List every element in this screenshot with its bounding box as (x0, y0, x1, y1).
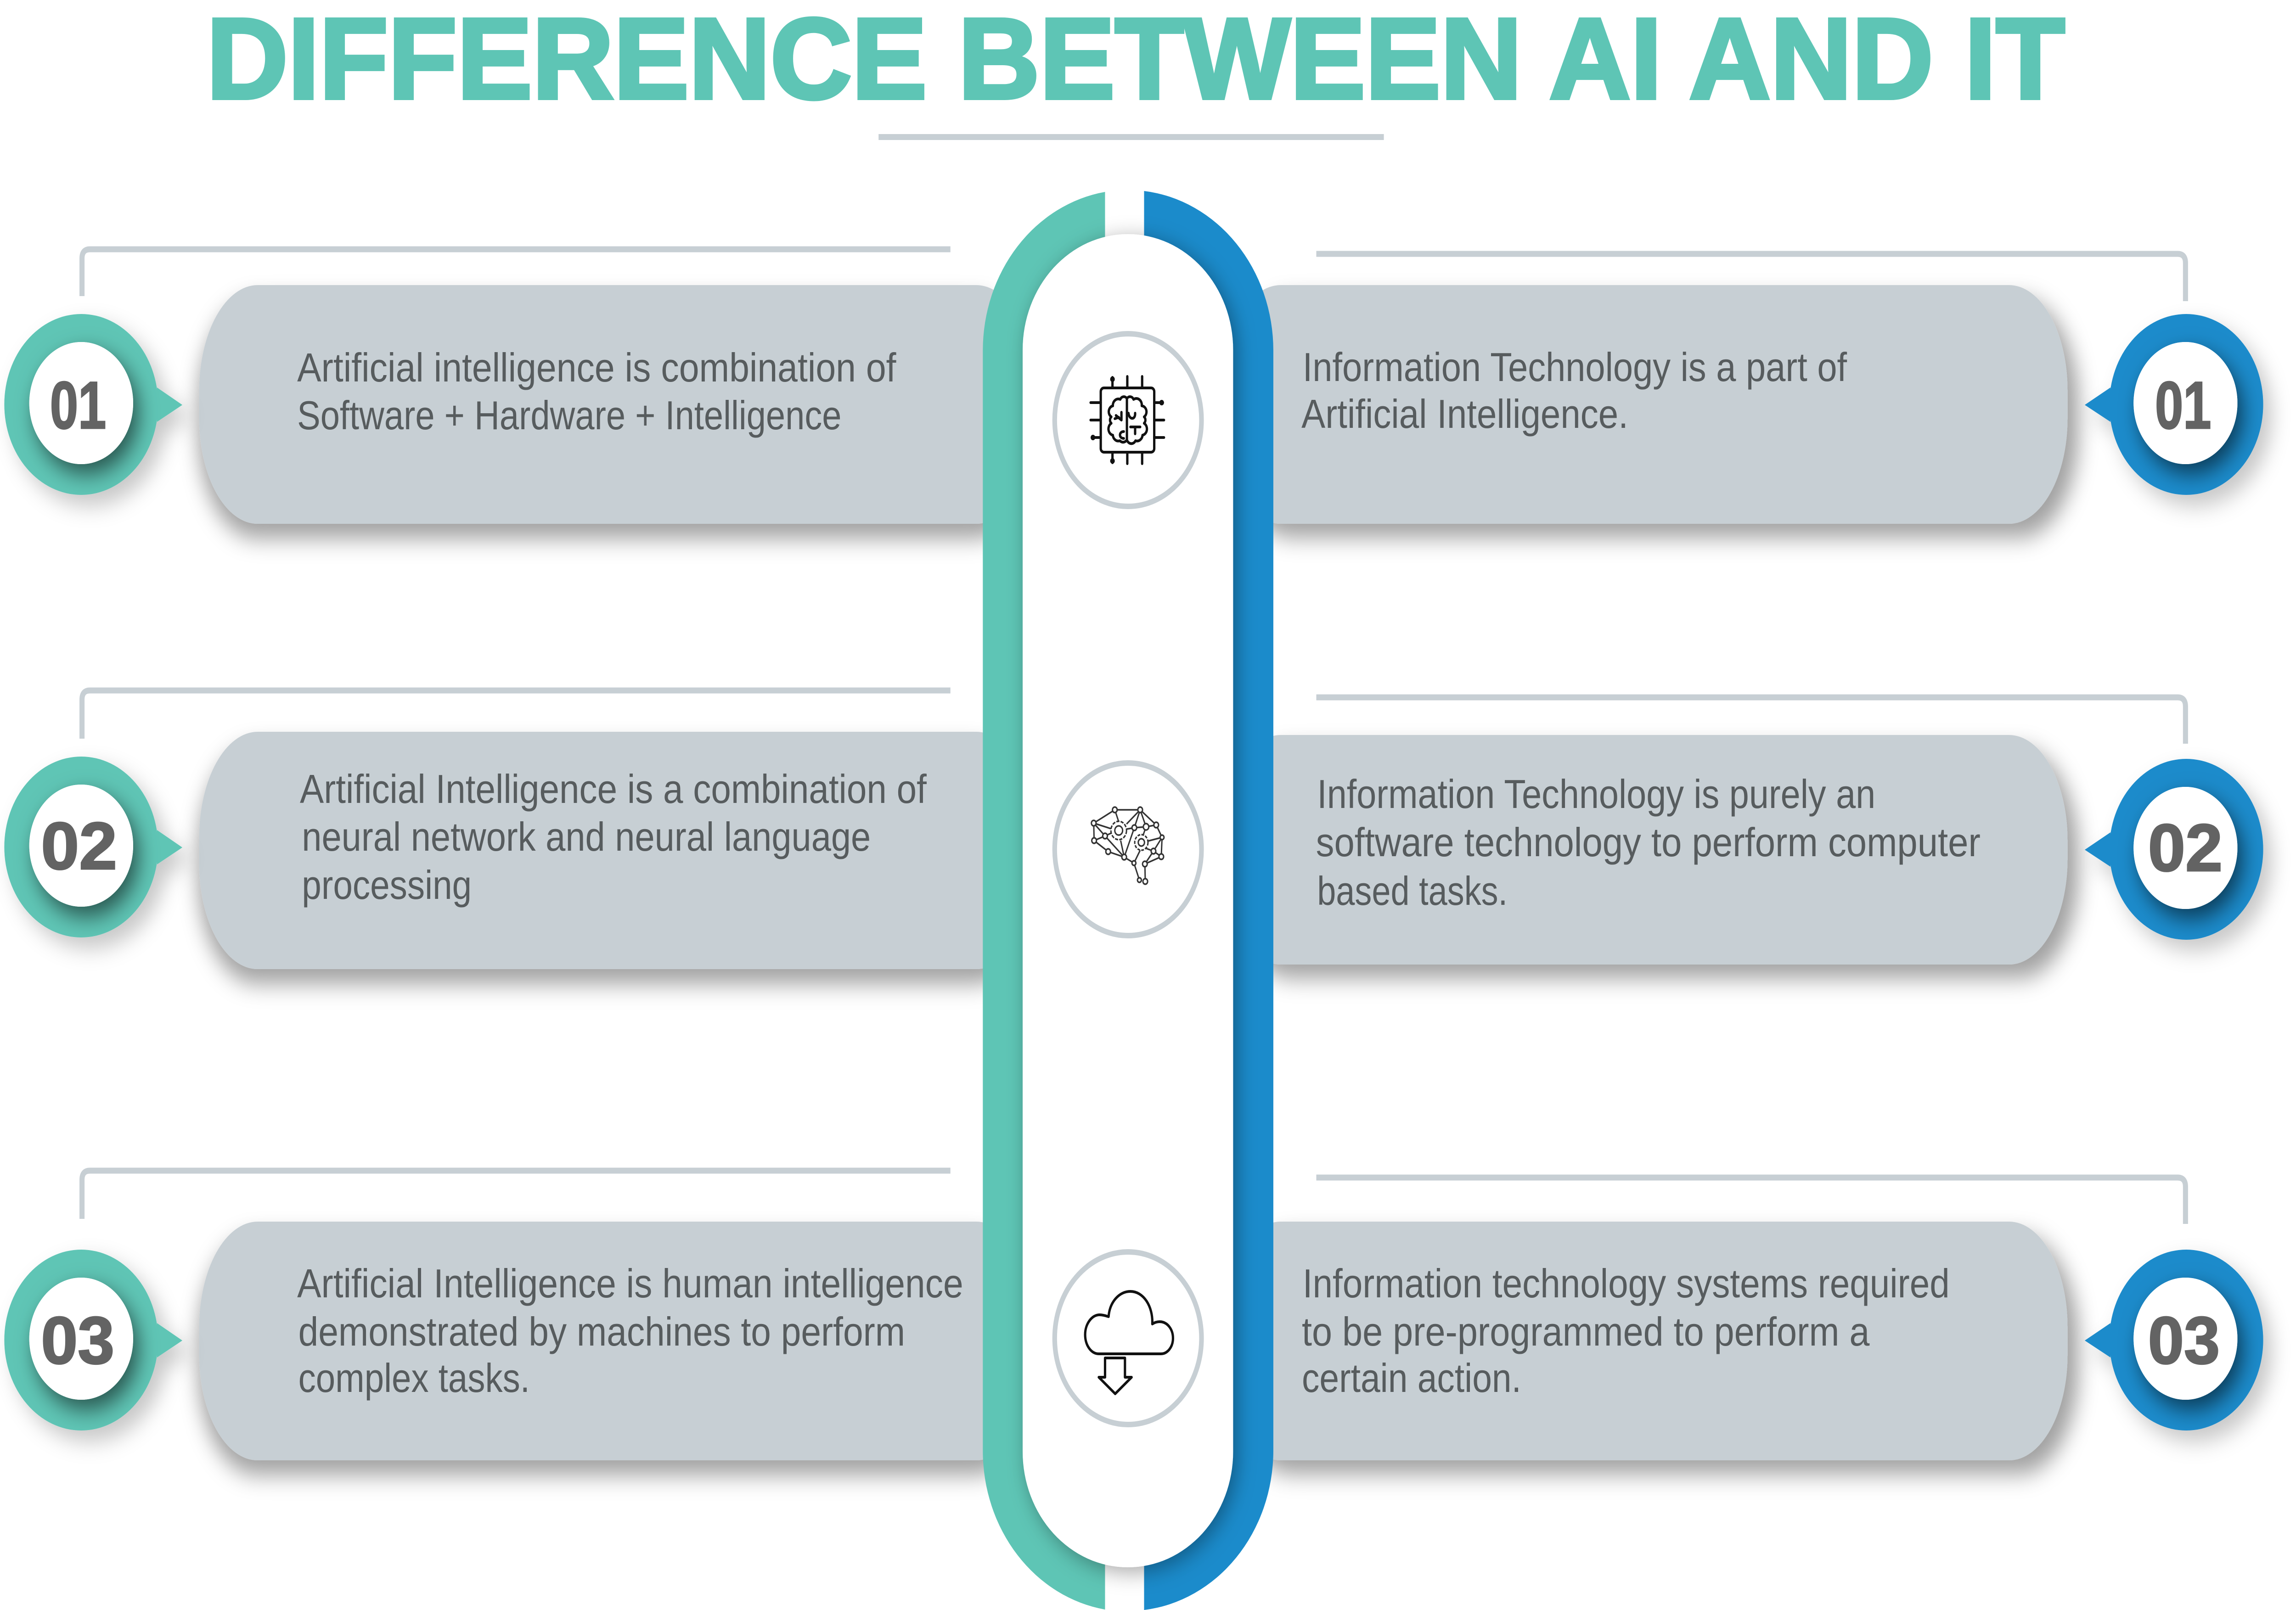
text: left row 3: complex tasks. (298, 1356, 530, 1401)
bracket: left row 3 (82, 1171, 951, 1219)
badge: blue 01 (2085, 314, 2263, 495)
panel: left row 2 (199, 732, 1035, 969)
badge: teal 02 (4, 757, 182, 937)
text: left row 2: neural network and neural language (302, 814, 871, 859)
title underline (878, 134, 1384, 140)
bracket: right row 3 (1316, 1178, 2185, 1224)
badge: teal 01 (4, 314, 182, 495)
icon: AI chip brain (1055, 334, 1201, 506)
text: right row 1 (1301, 345, 1847, 437)
badge: teal 01: 01 (50, 367, 106, 443)
text: right row 1: Artificial Intelligence. (1301, 392, 1628, 437)
badge: blue 03: 03 (2148, 1302, 2220, 1378)
bracket: right row 1 (1316, 254, 2185, 301)
text: left row 3: demonstrated by machines to perform (298, 1309, 905, 1354)
text: right row 3 (1302, 1261, 1950, 1401)
text: left row 2: processing (302, 863, 472, 908)
badge: teal 02: 02 (41, 808, 117, 883)
text: left row 3 (297, 1261, 963, 1401)
bracket: left row 1 (82, 249, 951, 296)
badge: blue 01: 01 (2155, 367, 2211, 443)
text: left row 2: Artificial Intelligence is a combination of (300, 767, 927, 812)
panel: left row 1 (199, 285, 1035, 524)
text: right row 3: certain action. (1302, 1356, 1521, 1401)
panel: right row 2 (1222, 735, 2068, 965)
text: left row 3: Artificial Intelligence is human intelligence (297, 1261, 963, 1306)
bracket: left row 2 (82, 690, 951, 739)
text: left row 2 (300, 767, 927, 908)
text: right row 1: Information Technology is a part of (1303, 345, 1847, 390)
center column: blue arc band (1144, 191, 1273, 1610)
text: right row 2 (1316, 772, 1981, 914)
panel: right row 3 (1222, 1222, 2068, 1460)
center column: white capsule (1023, 234, 1233, 1567)
text: right row 2: Information Technology is purely an (1317, 772, 1875, 817)
badge: teal 03 (4, 1250, 182, 1430)
bracket: right row 2 (1316, 697, 2185, 744)
badge: blue 02: 02 (2148, 810, 2223, 885)
badge: blue 02 (2085, 759, 2263, 940)
text: right row 2: based tasks. (1317, 869, 1508, 914)
text: right row 3: to be pre-programmed to perform a (1302, 1309, 1870, 1354)
text: left row 1 (297, 345, 896, 438)
text: left row 1: Software + Hardware + Intelligence (297, 393, 841, 438)
center column: teal arc band (983, 192, 1105, 1610)
panel: right row 1 (1222, 285, 2068, 524)
panel: left row 3 (199, 1222, 1035, 1460)
badge: teal 03: 03 (41, 1302, 114, 1378)
text: right row 2: software technology to perform computer (1316, 820, 1981, 865)
text: right row 3: Information technology systems required (1303, 1261, 1950, 1306)
badge: blue 03 (2085, 1250, 2263, 1430)
text: left row 1: Artificial intelligence is combination of (297, 345, 896, 390)
icon: cloud download (1055, 1252, 1201, 1425)
icon: neural network brain (1055, 763, 1201, 936)
